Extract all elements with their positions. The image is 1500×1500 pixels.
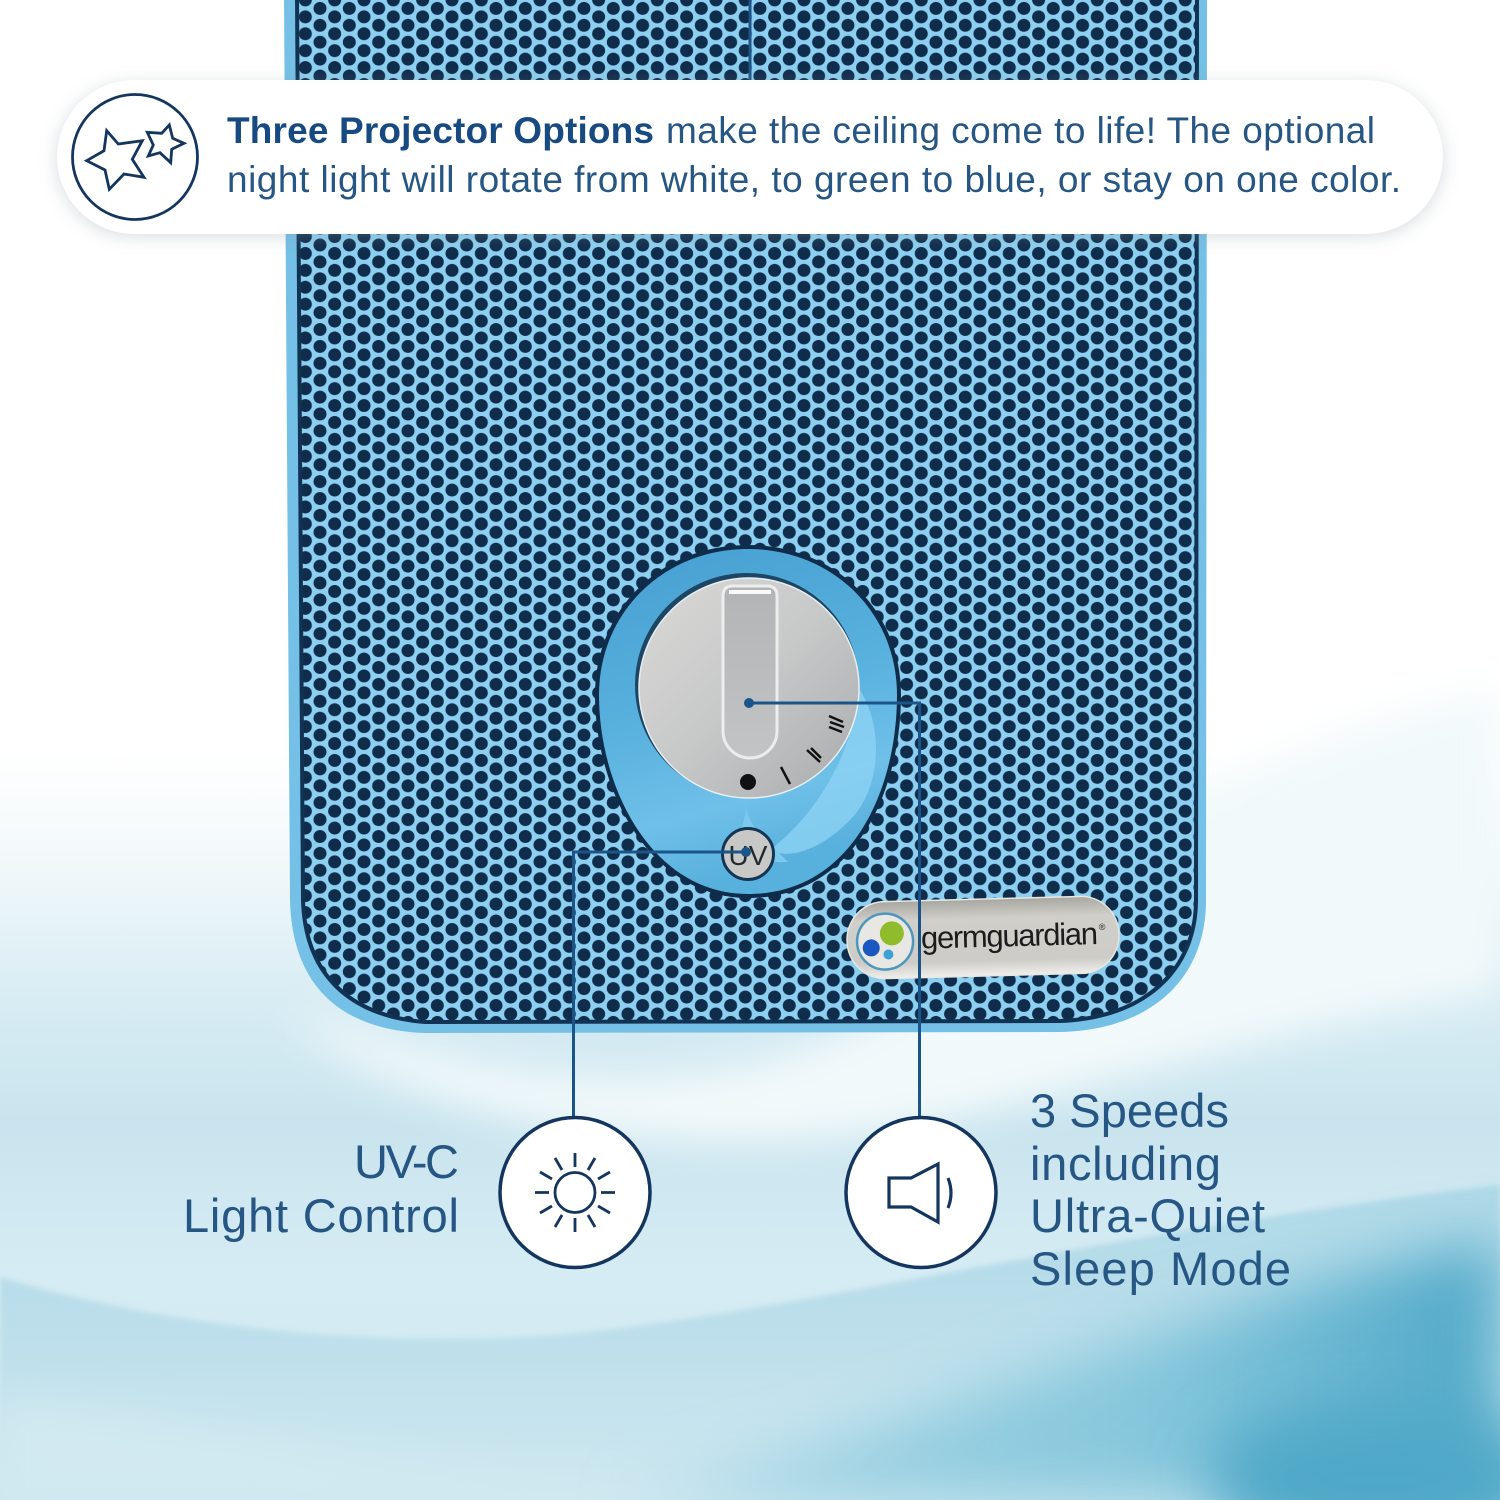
- knob handle: [723, 586, 777, 758]
- germguardian badge: [846, 895, 1120, 980]
- top callout pill: [57, 80, 1443, 236]
- callout text: night light will rotate from white, to green to blue, or stay on one color.: [227, 159, 1401, 200]
- callout text: [227, 110, 1401, 200]
- label: 3 speeds: Sleep Mode: [1030, 1242, 1291, 1295]
- knob speed marks: [740, 716, 844, 790]
- label: 3 speeds: [1030, 1084, 1291, 1295]
- callout text: make the ceiling come to life! The optional: [666, 110, 1375, 151]
- label: UV-C light control: UV-C: [354, 1135, 459, 1188]
- germguardian badge: germguardian: [921, 916, 1098, 956]
- perforated mesh grille: [299, 0, 1195, 1020]
- label: UV-C light control: Light Control: [183, 1189, 459, 1242]
- purifier outer shell: [284, 0, 1207, 1033]
- UV button: [720, 806, 788, 880]
- label: 3 speeds: Ultra-Quiet: [1030, 1189, 1265, 1242]
- icon: speaker in circle: [846, 1118, 996, 1268]
- label: UV-C light control: [183, 1135, 459, 1242]
- callout text: Three Projector Options: [227, 110, 654, 151]
- callout lines with anchor dots: [574, 0, 920, 1120]
- label: 3 speeds: including: [1030, 1137, 1221, 1190]
- purifier dark inner edge: [295, 0, 1199, 1024]
- icon: stars in circle: [72, 94, 198, 220]
- control recess: [595, 545, 901, 898]
- UV button: UV: [729, 840, 768, 871]
- product: air purifier body: [284, 0, 1207, 1033]
- icon: sun in circle: [500, 1118, 650, 1268]
- germguardian badge: ®: [1099, 922, 1106, 932]
- label: 3 speeds: 3 Speeds: [1030, 1084, 1229, 1137]
- speed dial knob: [635, 573, 859, 798]
